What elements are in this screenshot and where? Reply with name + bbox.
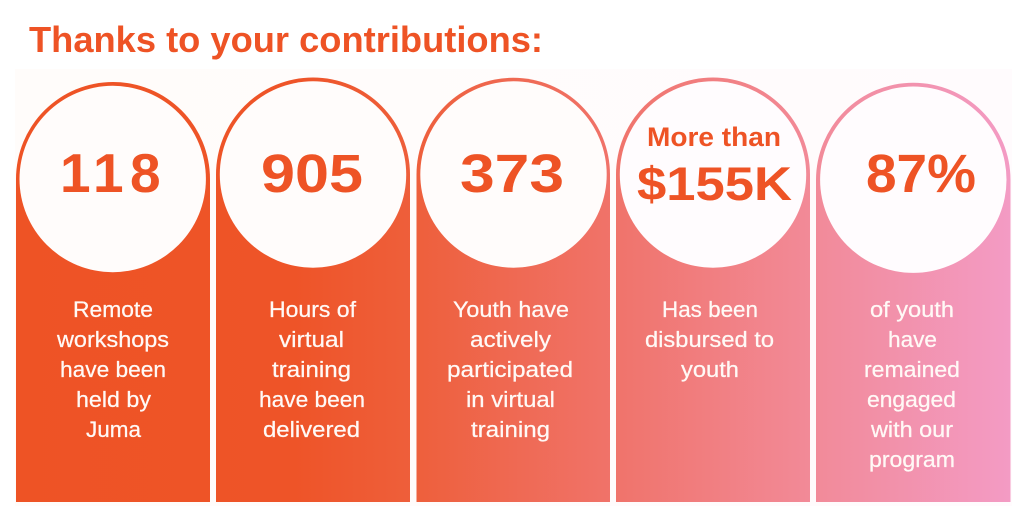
description 5: remained: [864, 357, 960, 382]
panel: more than $155K: [616, 77, 810, 502]
number 373: 373: [460, 144, 564, 204]
circle 3: [420, 81, 607, 268]
description 2: Hours of: [269, 297, 357, 322]
panel: 373 youth: [416, 78, 610, 502]
description 3: training: [471, 417, 550, 442]
number $155K: $155K: [637, 157, 792, 210]
description 4: disbursed to: [645, 327, 774, 352]
description 1: have been: [60, 357, 166, 382]
description 5: have: [888, 327, 937, 352]
number 118: 118: [60, 142, 161, 204]
description 5: program: [869, 447, 955, 472]
description 2: virtual: [279, 327, 344, 352]
number 87%: 87%: [866, 144, 976, 204]
panel: 905 hours of training: [216, 78, 410, 502]
column shape 2: [216, 78, 410, 502]
description 1: workshops: [56, 327, 169, 352]
title: Thanks to your contributions:: [29, 19, 543, 60]
description 4: Has been: [662, 297, 758, 322]
description 5: of youth: [870, 297, 954, 322]
description 3: in virtual: [466, 387, 555, 412]
description 3: Youth have: [453, 297, 569, 322]
description 2: training: [272, 357, 351, 382]
column shape 5: [816, 83, 1010, 502]
description 1: Juma: [86, 417, 141, 442]
description 4: youth: [681, 357, 739, 382]
circle 5: [820, 86, 1006, 273]
description 1: Remote: [73, 297, 153, 322]
circle 4: [620, 81, 806, 268]
description 3: actively: [470, 327, 552, 352]
description 1: held by: [76, 387, 152, 412]
number 905: 905: [261, 144, 363, 204]
description 5: with our: [870, 417, 954, 442]
description 5: engaged: [867, 387, 956, 412]
label more than: More than: [647, 122, 781, 152]
description 3: participated: [447, 357, 573, 382]
panel: 118 remote workshops: [16, 82, 210, 502]
circle 1: [20, 86, 206, 272]
description 2: have been: [259, 387, 365, 412]
column shape 1: [16, 82, 210, 502]
description 2: delivered: [263, 417, 360, 442]
column shape 3: [416, 78, 610, 502]
column shape 4: [616, 77, 810, 502]
panel: 87% of youth: [816, 83, 1010, 502]
circle 2: [220, 81, 406, 268]
